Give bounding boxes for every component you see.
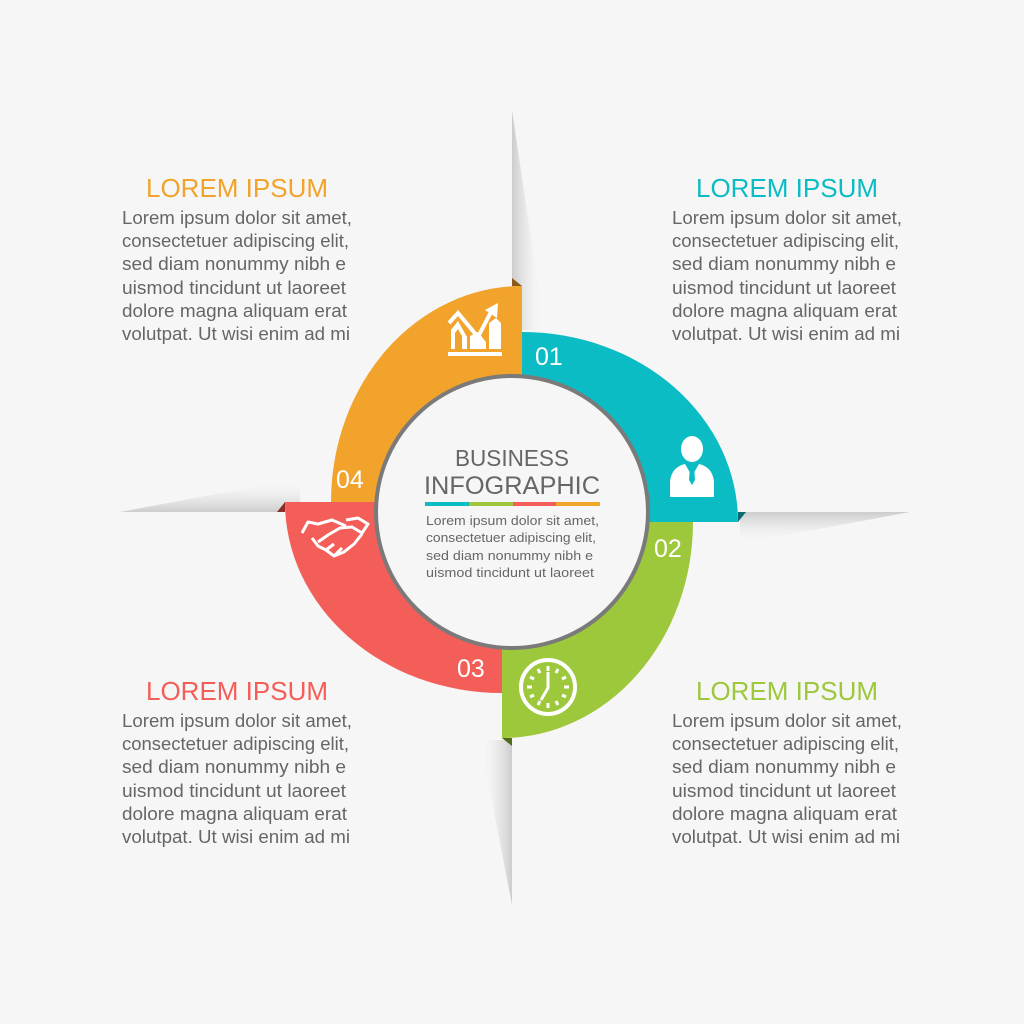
text block: top-left: Lorem ipsum dolor sit amet, [122,208,352,228]
center title: BUSINESS [455,445,569,471]
segment: 02 green [502,522,693,746]
text block: top-left: LOREM IPSUM [146,173,328,203]
text block: bottom-left: volutpat. Ut wisi enim ad mi [122,827,350,847]
text block: bottom-left [122,676,352,847]
center body text: consectetuer adipiscing elit, [426,530,596,545]
center circle [376,376,648,648]
numbers: 03 [457,655,485,683]
text block: bottom-left: consectetuer adipiscing elit, [122,734,349,754]
text block: top-right [672,173,902,344]
center title: INFOGRAPHIC [424,472,600,500]
text block: bottom-right: sed diam nonummy nibh e [672,757,896,777]
segment: 01 teal [522,332,746,522]
center body text: uismod tincidunt ut laoreet [426,565,594,580]
text block: top-right: volutpat. Ut wisi enim ad mi [672,324,900,344]
fold shadows [120,110,910,905]
center body text: sed diam nonummy nibh e [426,548,593,563]
center body text: Lorem ipsum dolor sit amet, [426,513,599,528]
text block: bottom-left: sed diam nonummy nibh e [122,757,346,777]
text block: bottom-right: LOREM IPSUM [696,676,878,706]
text block: top-left: consectetuer adipiscing elit, [122,231,349,251]
icon: chart [448,303,502,356]
text block: top-right: dolore magna aliquam erat [672,301,897,321]
icon: handshake [302,518,368,556]
text block: top-left: volutpat. Ut wisi enim ad mi [122,324,350,344]
numbers: 01 [535,343,563,371]
icon: clock [521,660,575,714]
text block: top-right: sed diam nonummy nibh e [672,254,896,274]
text block: top-right: consectetuer adipiscing elit, [672,231,899,251]
text block: bottom-right: consectetuer adipiscing elit, [672,734,899,754]
center body text [426,513,599,580]
segment: 04 orange [331,278,522,502]
text block: bottom-left: dolore magna aliquam erat [122,804,347,824]
color bar [425,502,600,506]
text block: top-right: LOREM IPSUM [696,173,878,203]
text block: bottom-right: uismod tincidunt ut laoreet [672,781,896,801]
numbers: 02 [654,535,682,563]
text block: top-left: sed diam nonummy nibh e [122,254,346,274]
numbers [336,343,682,683]
text block: bottom-right [672,676,902,847]
text block: top-left: uismod tincidunt ut laoreet [122,278,346,298]
text block: bottom-left: LOREM IPSUM [146,676,328,706]
text block: bottom-left: Lorem ipsum dolor sit amet, [122,711,352,731]
center title [424,445,600,500]
segment: 03 red [277,502,502,693]
text block: top-right: Lorem ipsum dolor sit amet, [672,208,902,228]
text block: bottom-right: dolore magna aliquam erat [672,804,897,824]
text block: bottom-left: uismod tincidunt ut laoreet [122,781,346,801]
text block: bottom-right: volutpat. Ut wisi enim ad mi [672,827,900,847]
icon: person [670,436,714,497]
numbers: 04 [336,466,364,494]
text block: top-right: uismod tincidunt ut laoreet [672,278,896,298]
text block: bottom-right: Lorem ipsum dolor sit amet, [672,711,902,731]
text block: top-left: dolore magna aliquam erat [122,301,347,321]
text block: top-left [122,173,352,344]
